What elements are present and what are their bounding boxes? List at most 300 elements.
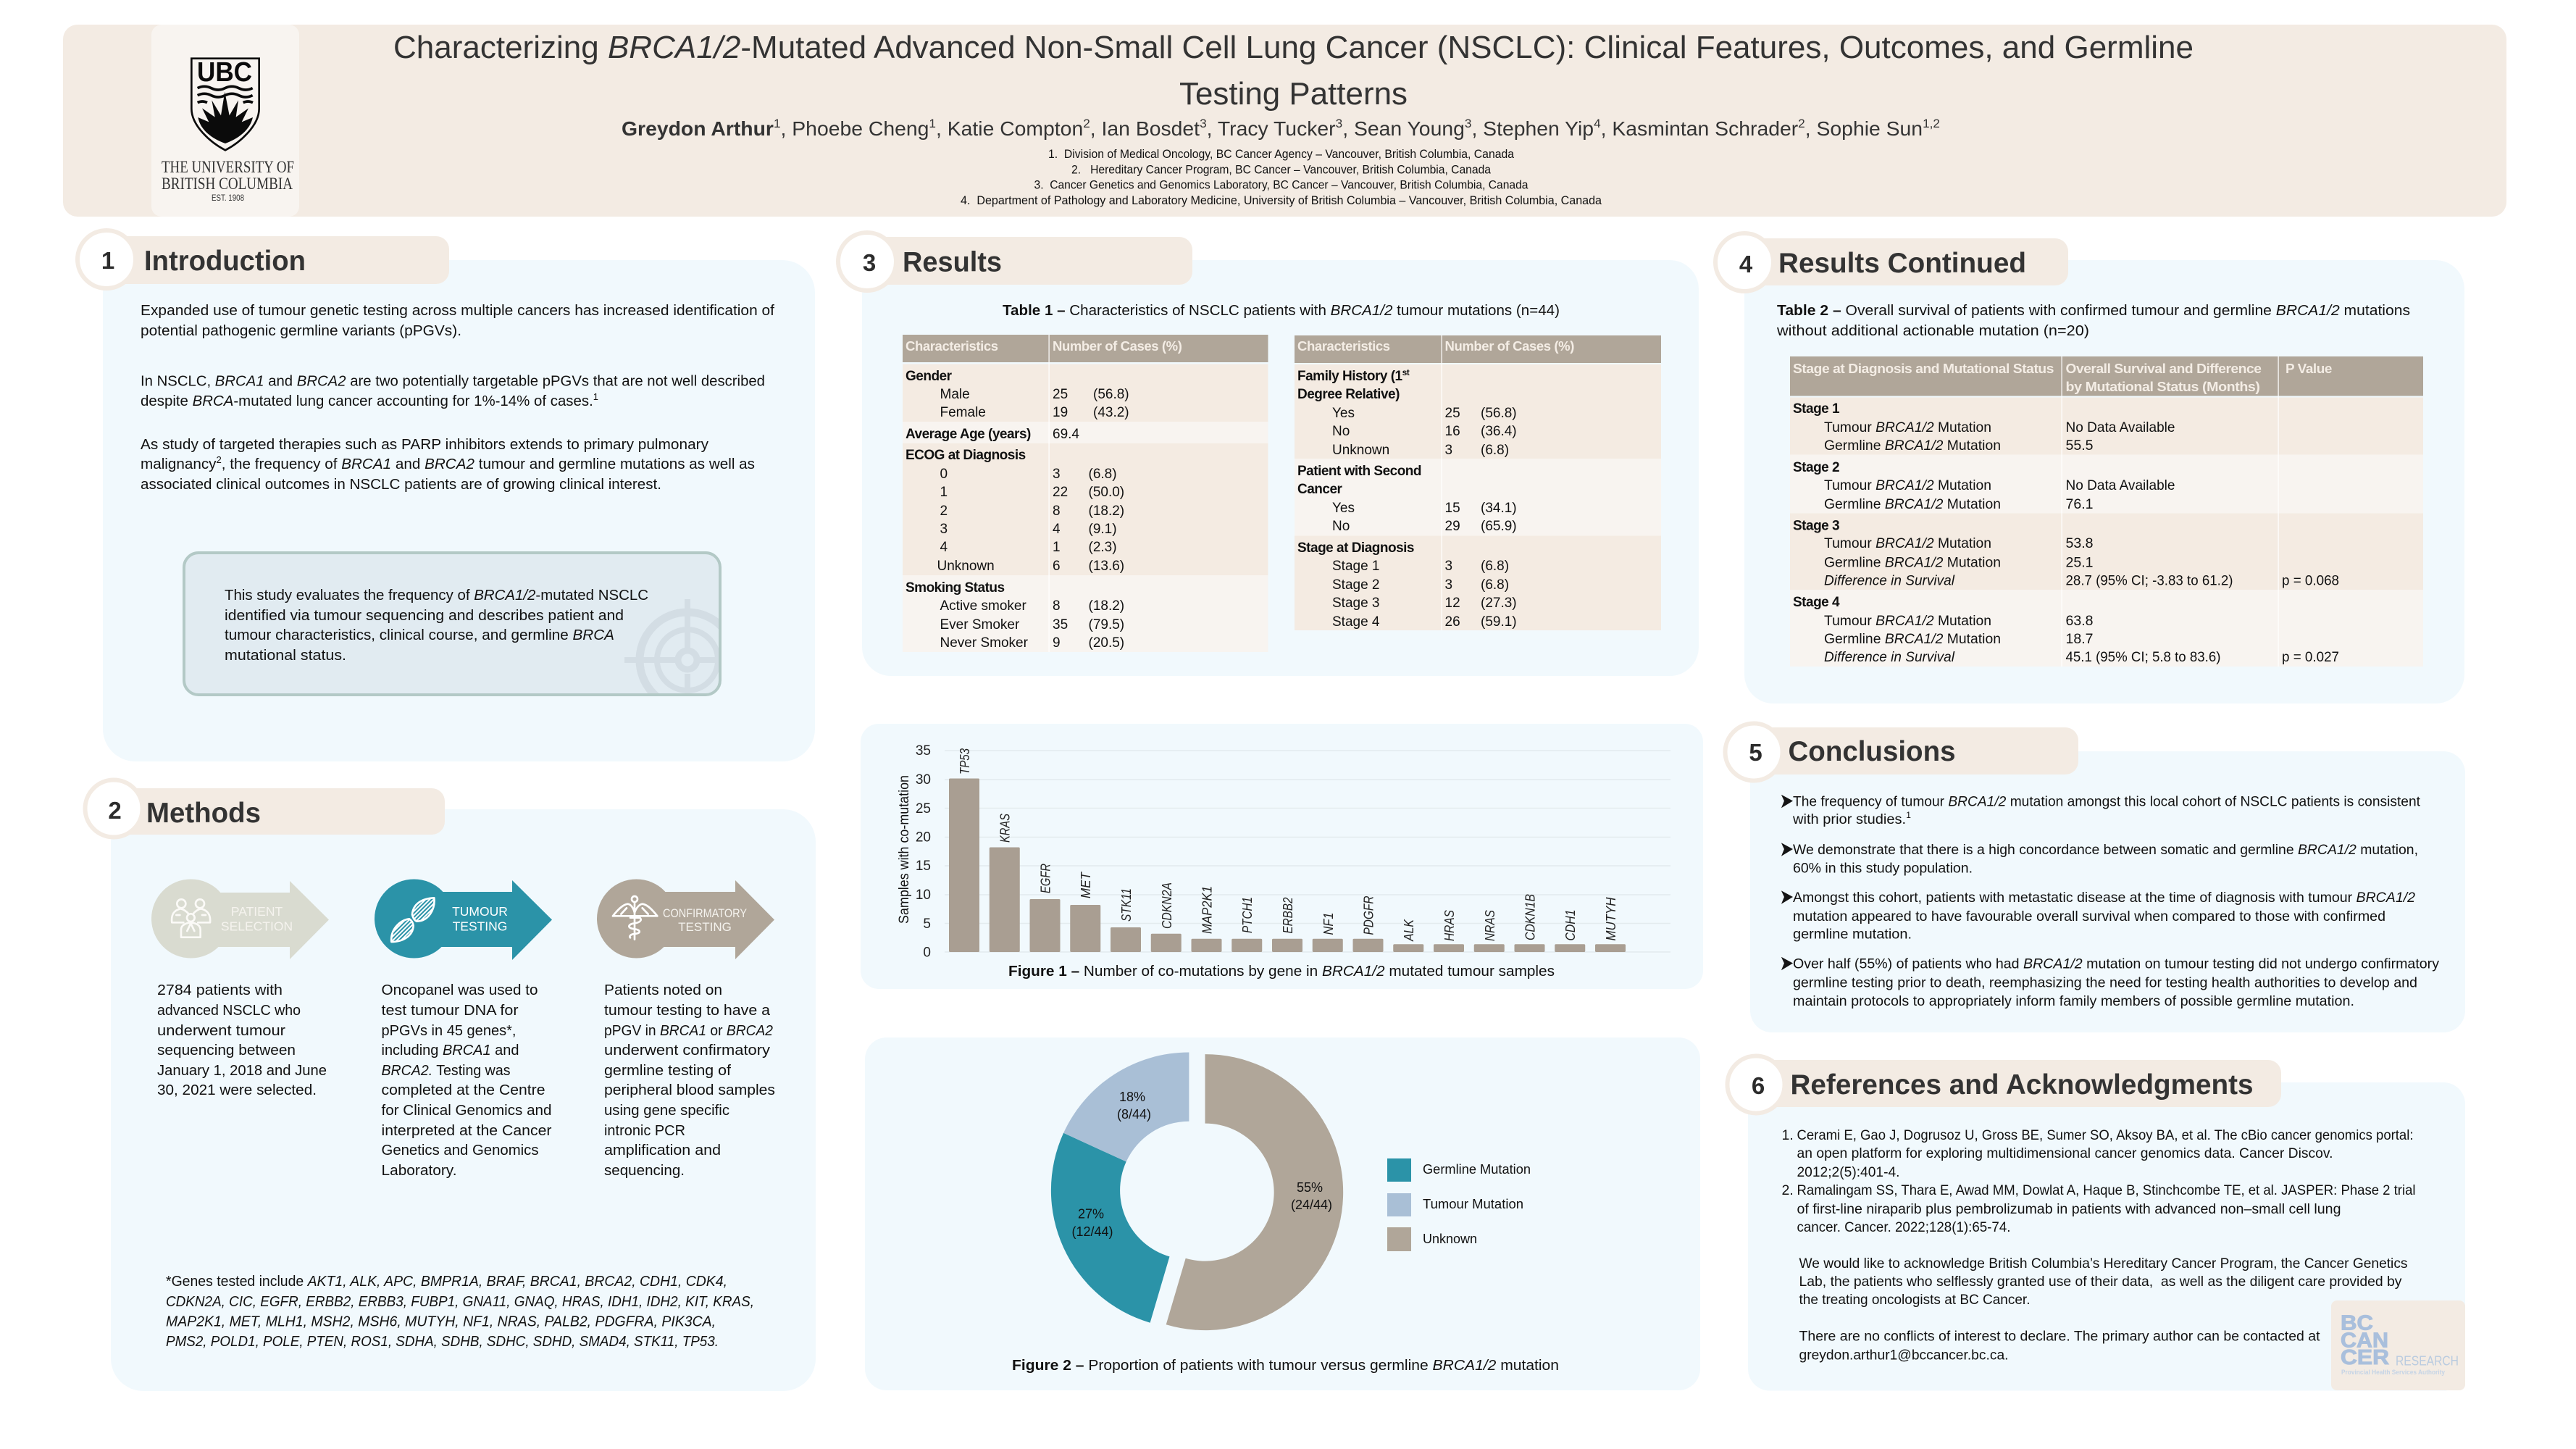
panel: results continued (1715, 233, 2464, 703)
table 1 right: Yes (1332, 501, 1355, 516)
bar chart: co-mutations: CDKN1B (1523, 894, 1537, 940)
table 1 right: Family History (1 (1297, 369, 1402, 384)
bar chart: co-mutations: MAP2K1 (1200, 886, 1214, 934)
table 1 right: st (1402, 367, 1410, 377)
bar chart: co-mutations: 0 (923, 945, 931, 961)
bar chart: co-mutations: ALK (1402, 919, 1416, 942)
text: confirmatory testing: using gene specific (604, 1102, 729, 1119)
table 1 right: 12 (1444, 596, 1460, 611)
heading: introduction: 1 (101, 247, 114, 274)
authors: 1 (929, 117, 936, 130)
introduction text: potential pathogenic germline variants (pPGVs). (141, 322, 461, 339)
title: Characterizing BRCA1/2-Mutated Advanced Non-Small Cell Lung Cancer (NSCLC): Clinical Features, Outcomes, and Germline (393, 30, 2194, 65)
heading: references: 6 (1752, 1072, 1765, 1099)
text: tumour testing: interpreted at the Cancer (381, 1122, 552, 1139)
table 2: Tumour BRCA1/2 Mutation (1824, 535, 1991, 551)
table 2: Stage 4 (1793, 595, 1840, 610)
table 2: Stage 1 (1793, 401, 1840, 417)
bar chart: co-mutations: MET (1079, 871, 1093, 898)
references list: Ramalingam SS, Thara E, Awad MM, Dowlat A, Haque B, Stinchcombe TE, et al. JASPER: Phase 2 trial (1797, 1182, 2415, 1198)
table 1 right: 25 (1444, 406, 1460, 421)
text: confirmatory testing: tumour testing to have a (604, 1002, 771, 1019)
BC Cancer Research logo: BC (2341, 1311, 2373, 1335)
introduction text: malignancy (141, 456, 216, 472)
heading: methods: 2 (108, 797, 122, 824)
heading: references: References and Acknowledgments (1791, 1069, 2253, 1101)
table 2: No Data Available (2066, 477, 2175, 493)
table 1 right: Stage 4 (1332, 614, 1380, 630)
table 1 left: 69.4 (1053, 427, 1079, 442)
callout: study aim (184, 553, 735, 708)
table 1 right: 26 (1444, 614, 1460, 630)
text: tumour testing: for Clinical Genomics and (381, 1102, 552, 1119)
arrow: confirmatory testing (597, 880, 774, 959)
arrow: patient selection: PATIENT (231, 904, 283, 919)
title (393, 30, 2194, 112)
conclusions list: The frequency of tumour BRCA1/2 mutation amongst this local cohort of NSCLC patients is consistent (1793, 794, 2421, 810)
table 2: Stage at Diagnosis and Mutational Status (1793, 361, 2054, 376)
conclusions list (1782, 794, 2439, 1009)
arrow: tumour testing (375, 880, 552, 960)
UBC logo: THE UNIVERSITY OF (162, 158, 294, 176)
references list: an open platform for exploring multidimensional cancer genomics data. Cancer Discov. (1797, 1145, 2333, 1161)
affiliations: 4. Department of Pathology and Laboratory Medicine, University of British Columbia – Vancouver, British Columbia, Canada (961, 194, 1602, 207)
introduction text: despite BRCA-mutated lung cancer accounting for 1%-14% of cases. (141, 393, 594, 409)
table 1 left: (18.2) (1088, 598, 1124, 614)
header banner (63, 25, 2506, 217)
text: tumour testing: including BRCA1 and (381, 1042, 519, 1058)
table 1 left: 1 (1053, 540, 1061, 555)
table 1 left: (9.1) (1088, 522, 1117, 537)
authors: , Stephen Yip (1471, 117, 1594, 140)
conclusions list: Amongst this cohort, patients with metastatic disease at the time of diagnosis with tumour BRCA1/2 (1793, 890, 2415, 906)
conclusions list: 1 (1906, 810, 1911, 820)
text: confirmatory testing: amplification and (604, 1142, 721, 1158)
table 1 left: Ever Smoker (940, 617, 1020, 632)
legend: Germline Mutation (1423, 1162, 1531, 1177)
table 2: Difference in Survival (1824, 649, 1955, 665)
text: confirmatory testing: sequencing. (604, 1162, 685, 1179)
table 1 right: Stage 2 (1332, 577, 1379, 593)
authors: 1,2 (1923, 117, 1940, 130)
legend: Unknown (1423, 1232, 1477, 1246)
text: patient selection: 30, 2021 were selected. (157, 1082, 317, 1098)
table 2: Stage 3 (1793, 519, 1839, 533)
UBC logo: BRITISH COLUMBIA (162, 175, 293, 193)
title: Testing Patterns (1179, 77, 1408, 112)
table 1 right: 3 (1444, 559, 1452, 574)
references list: 2. (1782, 1182, 1794, 1198)
table 1 right: (36.4) (1481, 424, 1517, 439)
UBC logo (151, 25, 299, 217)
table 1 right: (6.8) (1481, 577, 1509, 593)
bar chart: co-mutations: 20 (916, 830, 931, 845)
introduction text: In NSCLC, BRCA1 and BRCA2 are two potentially targetable pPGVs that are not well described (141, 372, 765, 390)
bar chart: co-mutations: NRAS (1483, 910, 1497, 941)
table 1 right: Patient with Second (1297, 464, 1421, 479)
bar chart: co-mutations: NF1 (1321, 913, 1336, 935)
table 1 left: Characteristics (906, 338, 998, 354)
conclusions list: We demonstrate that there is a high concordance between somatic and germline BRCA1/2 mutation, (1793, 842, 2418, 858)
table 1 left: Number of Cases (%) (1053, 338, 1182, 354)
references list: of first-line niraparib plus pembrolizumab in patients with advanced non–small cell lung (1797, 1201, 2341, 1217)
references list: 1. (1782, 1127, 1794, 1143)
bar chart: co-mutations: 25 (916, 801, 931, 817)
table 1 right: (6.8) (1481, 559, 1509, 574)
bar chart: co-mutations: CDH1 (1563, 910, 1578, 940)
table 1 left: 0 (940, 467, 948, 482)
legend (1387, 1158, 1531, 1251)
arrow: tumour testing: TESTING (453, 919, 507, 933)
table 1 right: Characteristics (1297, 338, 1390, 354)
bar chart: co-mutations: 5 (923, 916, 931, 932)
table 2: by Mutational Status (Months) (2066, 379, 2260, 394)
heading: methods: Methods (146, 798, 261, 829)
heading: introduction: Introduction (144, 246, 306, 277)
authors: 2 (1798, 117, 1805, 130)
table 2: Germline BRCA1/2 Mutation (1824, 631, 2001, 647)
text: confirmatory testing (604, 982, 775, 1179)
authors: , Kasmintan Schrader (1601, 117, 1798, 140)
table 1 right: (6.8) (1481, 443, 1509, 458)
table 2: p = 0.027 (2282, 649, 2339, 665)
table 2: 63.8 (2066, 613, 2093, 629)
gene list (166, 1273, 754, 1350)
table 1 right: Stage 1 (1332, 559, 1379, 574)
authors: , Katie Compton (936, 117, 1083, 140)
conclusions list: Over half (55%) of patients who had BRCA1/2 mutation on tumour testing did not undergo confirmatory (1793, 956, 2439, 972)
heading: methods (85, 780, 445, 838)
panel: results (838, 233, 1699, 676)
bar chart: co-mutations: EGFR (1039, 864, 1053, 893)
table 1 left: 8 (1053, 598, 1061, 614)
introduction text: , the frequency of (222, 456, 341, 472)
table 2 caption: without additional actionable mutation (n=20) (1776, 322, 2089, 339)
figure 1 caption: Figure 1 – Number of co-mutations by gene in BRCA1/2 mutated tumour samples (1008, 963, 1555, 980)
acknowledgments (1799, 1256, 2408, 1364)
heading: introduction (78, 230, 449, 288)
table 1 right: Unknown (1332, 443, 1389, 458)
arrow: patient selection: SELECTION (221, 919, 293, 933)
text: tumour testing: Oncopanel was used to (381, 982, 538, 998)
BC Cancer Research logo: Provincial Health Services Authority (2341, 1369, 2445, 1376)
donut chart: 27% (1078, 1207, 1104, 1222)
references list: cancer. Cancer. 2022;128(1):65-74. (1797, 1219, 2011, 1235)
table 1 left: 35 (1053, 617, 1068, 632)
table 1 right: Number of Cases (%) (1444, 338, 1574, 354)
table 1 left: (2.3) (1088, 540, 1117, 555)
authors: , Ian Bosdet (1090, 117, 1200, 140)
table 1 right (1295, 335, 1661, 630)
arrow: tumour testing: TUMOUR (452, 904, 508, 919)
table 2 (1790, 356, 2423, 667)
bar chart: co-mutations: HRAS (1442, 910, 1457, 941)
BC Cancer Research logo: CAN (2341, 1329, 2388, 1352)
authors: 3 (1465, 117, 1471, 130)
table 2: Overall Survival and Difference (2066, 361, 2262, 376)
table 1 right: Stage at Diagnosis (1297, 540, 1414, 556)
table 1 left: Smoking Status (906, 580, 1005, 596)
bar chart: co-mutations: Samples with co-mutation (896, 775, 912, 924)
table 1 left: Unknown (937, 559, 995, 574)
table 1 left: (20.5) (1088, 635, 1124, 651)
text: patient selection: sequencing between (157, 1042, 296, 1058)
introduction text: As study of targeted therapies such as PARP inhibitors extends to primary pulmonary (141, 436, 709, 453)
table 2: 18.7 (2066, 631, 2093, 647)
BC Cancer Research logo (2331, 1300, 2465, 1390)
table 1 left: (18.2) (1088, 504, 1124, 519)
text: confirmatory testing: germline testing of (604, 1062, 731, 1079)
heading: conclusions: 5 (1749, 739, 1762, 766)
gene list: *Genes tested include AKT1, ALK, APC, BMPR1A, BRAF, BRCA1, BRCA2, CDH1, CDK4, (166, 1273, 727, 1290)
table 2 caption: Table 2 – Overall survival of patients with confirmed tumour and germline BRCA1/2 mutations (1777, 302, 2410, 319)
conclusions list: mutation appeared to have favourable overall survival when compared to those with confirmed (1793, 909, 2385, 924)
table 1 left: ECOG at Diagnosis (906, 448, 1026, 463)
heading: results: Results (903, 246, 1002, 278)
table 1 left: Active smoker (940, 598, 1026, 614)
UBC logo: EST. 1908 (212, 193, 244, 203)
heading: conclusions: Conclusions (1788, 736, 1956, 767)
heading: results: 3 (863, 249, 876, 276)
table 2: 53.8 (2066, 535, 2093, 551)
legend: Tumour Mutation (1423, 1197, 1523, 1211)
table 1 right: (27.3) (1481, 596, 1517, 611)
donut chart: (8/44) (1117, 1107, 1151, 1122)
table 2: Difference in Survival (1824, 572, 1955, 588)
table 2 caption (1776, 302, 2410, 339)
bar chart: co-mutations (896, 743, 1670, 961)
gene list: CDKN2A, CIC, EGFR, ERBB2, ERBB3, FUBP1, GNA11, GNAQ, HRAS, IDH1, IDH2, KIT, KRAS, (166, 1293, 754, 1310)
introduction text: associated clinical outcomes in NSCLC patients are of growing clinical interest. (141, 476, 661, 493)
table 1 right: 15 (1444, 501, 1460, 516)
table 1 right: (56.8) (1481, 406, 1517, 421)
bar chart: co-mutations: 30 (916, 772, 931, 788)
bar chart: co-mutations: STK11 (1119, 888, 1134, 922)
references list: Cerami E, Gao J, Dogrusoz U, Gross BE, Sumer SO, Aksoy BA, et al. The cBio cancer genomics portal: (1797, 1127, 2414, 1143)
introduction text: 1 (593, 391, 598, 402)
callout: study aim: This study evaluates the frequency of BRCA1/2-mutated NSCLC (225, 587, 648, 604)
text: tumour testing: completed at the Centre (381, 1082, 545, 1098)
table 2: 76.1 (2066, 496, 2093, 512)
authors: 2 (1083, 117, 1090, 130)
heading: results (838, 233, 1192, 291)
references list (1782, 1127, 2415, 1235)
icon: caduceus (613, 896, 657, 940)
callout: study aim: mutational status. (225, 647, 346, 664)
table 1 right: (65.9) (1481, 519, 1517, 534)
table 1 right: Cancer (1297, 482, 1343, 497)
table 1 left: 8 (1053, 504, 1061, 519)
table 1 left: 25 (1053, 387, 1068, 402)
panel: methods (85, 780, 816, 1391)
table 1 left (903, 335, 1268, 652)
table 1 left: 6 (1053, 559, 1061, 574)
authors: Greydon Arthur (622, 117, 774, 140)
references list: 2012;2(5):401-4. (1797, 1164, 1899, 1180)
conclusions list: germline mutation. (1793, 926, 1912, 942)
panel: introduction (78, 230, 815, 761)
table 1 right: 3 (1444, 577, 1452, 593)
introduction text: 2 (217, 454, 222, 465)
authors: , Tracy Tucker (1207, 117, 1336, 140)
table 1 right: 29 (1444, 519, 1460, 534)
bar chart: co-mutations: 10 (916, 888, 931, 903)
table 2: P Value (2286, 361, 2332, 376)
text: patient selection (157, 982, 327, 1098)
icon: patients (172, 899, 210, 938)
text: tumour testing: BRCA2. Testing was (381, 1062, 510, 1079)
table 2: Germline BRCA1/2 Mutation (1824, 496, 2001, 512)
authors: , Sean Young (1342, 117, 1465, 140)
conclusions list: germline testing prior to death, reemphasizing the need for testing health authorities to develop and (1793, 975, 2417, 991)
table 1 right: (59.1) (1481, 614, 1517, 630)
table 1 left: 3 (940, 522, 948, 537)
text: tumour testing: Laboratory. (381, 1162, 456, 1179)
figure 2 caption: Figure 2 – Proportion of patients with tumour versus germline BRCA1/2 mutation (1012, 1357, 1559, 1374)
table 1 left: Male (940, 387, 970, 402)
table 2: Stage 2 (1793, 460, 1839, 475)
table 2: 45.1 (95% CI; 5.8 to 83.6) (2066, 649, 2221, 665)
icon: target (624, 599, 719, 693)
table 2: No Data Available (2066, 419, 2175, 435)
affiliations: 1. Division of Medical Oncology, BC Cancer Agency – Vancouver, British Columbia, Canada (1048, 148, 1515, 161)
table 1 right: Degree Relative) (1297, 387, 1400, 402)
table 1 right: Stage 3 (1332, 596, 1379, 611)
table 1 left: 2 (940, 504, 948, 519)
authors: , Phoebe Cheng (781, 117, 929, 140)
gene list: MAP2K1, MET, MLH1, MSH2, MSH6, MUTYH, NF1, NRAS, PALB2, PDGFRA, PIK3CA, (166, 1313, 716, 1330)
table 1 left: Female (940, 405, 986, 420)
text: tumour testing: pPGVs in 45 genes*, (381, 1022, 516, 1039)
arrow: patient selection (151, 880, 329, 959)
table 1 left: (50.0) (1088, 485, 1124, 500)
bar chart: co-mutations: PDGFR (1362, 895, 1376, 935)
donut chart: (12/44) (1071, 1224, 1113, 1239)
table 2: Tumour BRCA1/2 Mutation (1824, 613, 1991, 629)
text: tumour testing: Genetics and Genomics (381, 1142, 539, 1158)
donut chart: (24/44) (1291, 1198, 1332, 1212)
authors: 3 (1200, 117, 1207, 130)
table 1 left: (56.8) (1093, 387, 1129, 402)
table 1 left: (13.6) (1088, 559, 1124, 574)
text: tumour testing (381, 982, 552, 1179)
bar chart: co-mutations: 35 (916, 743, 931, 759)
table 1 left: 4 (1053, 522, 1061, 537)
conclusions list: with prior studies. (1793, 811, 1903, 827)
table 2: Tumour BRCA1/2 Mutation (1824, 477, 1991, 493)
text: confirmatory testing: pPGV in BRCA1 or BRCA2 (604, 1022, 774, 1039)
authors: 3 (1336, 117, 1342, 130)
text: confirmatory testing: intronic PCR (604, 1122, 685, 1139)
bar chart: co-mutations: KRAS (998, 814, 1013, 843)
acknowledgments: We would like to acknowledge British Columbia’s Hereditary Cancer Program, the Cancer Genetics (1799, 1256, 2408, 1271)
authors: 4 (1594, 117, 1601, 130)
heading: results continued: Results Continued (1778, 248, 2026, 279)
icon: DNA (391, 898, 435, 942)
acknowledgments: There are no conflicts of interest to declare. The primary author can be contacted at (1799, 1329, 2320, 1345)
text: patient selection: 2784 patients with (157, 982, 283, 998)
table 2: 28.7 (95% CI; -3.83 to 61.2) (2066, 572, 2233, 588)
arrow: confirmatory testing: CONFIRMATORY (663, 906, 747, 920)
table 1 left: Average Age (years) (906, 427, 1031, 442)
bar chart: co-mutations: MUTYH (1604, 897, 1618, 940)
table 1 right: (34.1) (1481, 501, 1517, 516)
table 1 left: 19 (1053, 405, 1068, 420)
table 2: 25.1 (2066, 555, 2093, 571)
UBC logo: UBC (197, 57, 252, 88)
callout: study aim: identified via tumour sequencing and describes patient and (225, 607, 624, 624)
table 2: 55.5 (2066, 438, 2094, 454)
text: confirmatory testing: peripheral blood samples (604, 1082, 775, 1098)
bar chart: co-mutations: PTCH1 (1240, 897, 1255, 933)
introduction text: Expanded use of tumour genetic testing across multiple cancers has increased identification of (141, 302, 774, 319)
table 1 left: 22 (1053, 485, 1068, 500)
table 1 left: 3 (1053, 467, 1061, 482)
bar chart: co-mutations: 15 (916, 859, 931, 874)
introduction text: BRCA1 and BRCA2 tumour and germline mutations as well as (341, 456, 753, 472)
table 1 left: Gender (906, 369, 953, 384)
callout: study aim: tumour characteristics, clinical course, and germline BRCA (225, 627, 614, 643)
bar chart: co-mutations: TP53 (958, 748, 972, 774)
panel: references and acknowledgments (1727, 1056, 2465, 1391)
table 1 left: (43.2) (1093, 405, 1129, 420)
text: patient selection: advanced NSCLC who (157, 1002, 301, 1019)
authors: 1 (774, 117, 781, 130)
donut chart: 18% (1119, 1090, 1145, 1104)
table 2: Tumour BRCA1/2 Mutation (1824, 419, 1991, 435)
table 1 caption: Table 1 – Characteristics of NSCLC patients with BRCA1/2 tumour mutations (n=44) (1003, 302, 1560, 319)
acknowledgments: greydon.arthur1@bccancer.bc.ca. (1799, 1348, 2008, 1364)
bar chart: co-mutations: CDKN2A (1160, 882, 1174, 929)
table 1 left: (79.5) (1088, 617, 1124, 632)
table 1 left: (6.8) (1088, 467, 1117, 482)
heading: results continued: 4 (1739, 251, 1753, 277)
conclusions list: 60% in this study population. (1793, 861, 1973, 877)
BC Cancer Research logo: RESEARCH (2396, 1353, 2459, 1368)
heading: references (1727, 1056, 2281, 1113)
acknowledgments: Lab, the patients who selflessly granted use of their data, as well as the diligent care provided by (1799, 1274, 2402, 1290)
text: tumour testing: test tumour DNA for (381, 1002, 519, 1019)
panel: figure 2 (865, 1037, 1700, 1390)
table 1 left: Never Smoker (940, 635, 1029, 651)
table 1 right: No (1332, 424, 1350, 439)
authors: , Sophie Sun (1805, 117, 1923, 140)
BC Cancer Research logo: CER (2341, 1346, 2389, 1369)
table 1 left: 9 (1053, 635, 1061, 651)
heading: conclusions (1726, 723, 2078, 781)
text: confirmatory testing: underwent confirmatory (604, 1042, 771, 1058)
bar chart: co-mutations: ERBB2 (1281, 897, 1295, 933)
table 2: p = 0.068 (2282, 572, 2339, 588)
table 1 right: No (1332, 519, 1350, 534)
acknowledgments: the treating oncologists at BC Cancer. (1799, 1292, 2030, 1308)
affiliations (961, 148, 1602, 207)
introduction text (141, 302, 774, 493)
table 2: Germline BRCA1/2 Mutation (1824, 438, 2001, 454)
arrow: confirmatory testing: TESTING (678, 920, 732, 934)
donut chart: 55% (1297, 1180, 1323, 1195)
heading: results continued (1715, 233, 2068, 291)
affiliations: 3. Cancer Genetics and Genomics Laboratory, BC Cancer – Vancouver, British Columbia, Canada (1034, 178, 1529, 191)
text: patient selection: January 1, 2018 and June (157, 1062, 327, 1079)
gene list: PMS2, POLD1, POLE, PTEN, ROS1, SDHA, SDHB, SDHC, SDHD, SMAD4, STK11, TP53. (166, 1333, 719, 1350)
table 1 right: Yes (1332, 406, 1355, 421)
table 2: Germline BRCA1/2 Mutation (1824, 555, 2001, 571)
conclusions list: maintain protocols to appropriately inform family members of possible germline mutation. (1793, 993, 2354, 1009)
table 1 left: 4 (940, 540, 948, 555)
panel: conclusions (1726, 723, 2465, 1032)
donut chart (1051, 1052, 1343, 1330)
